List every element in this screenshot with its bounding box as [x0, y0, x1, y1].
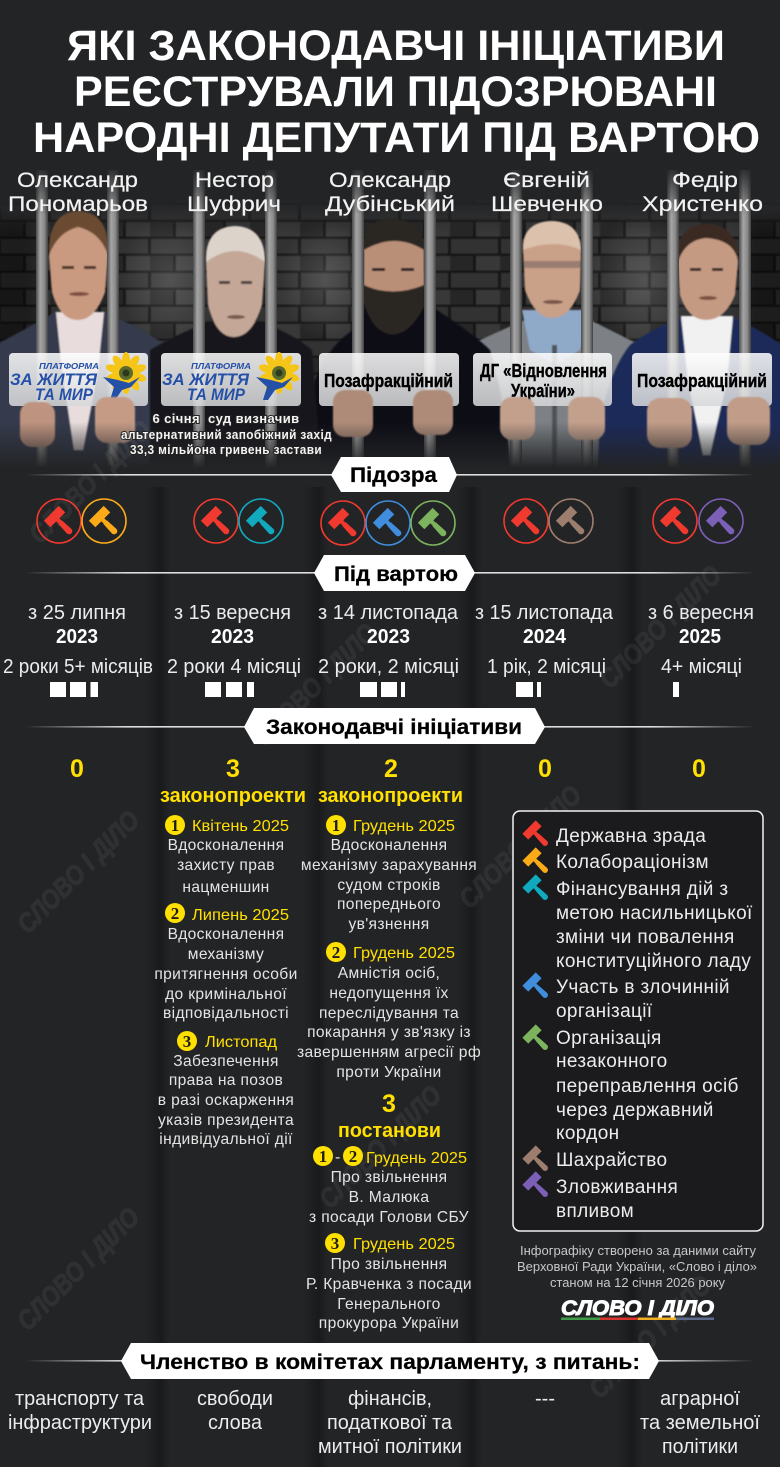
- legend: illegal border crossing: через державний: [556, 1100, 714, 1121]
- item 1: механізму зарахування: [301, 857, 477, 874]
- counts: zero initiatives: 0: [538, 755, 552, 783]
- person: Христенко: [597, 224, 780, 480]
- item 2: [154, 903, 298, 1022]
- resolution 3: прокурора України: [319, 1315, 459, 1332]
- watermarks: СЛОВО І ДІЛО: [593, 560, 727, 694]
- section: committees: [25, 1343, 755, 1379]
- committee: Шевченко: ---: [535, 1388, 555, 1410]
- committee: Христенко: та земельної: [640, 1412, 760, 1434]
- names: Христенко: [642, 193, 763, 216]
- party plates: [9, 353, 772, 406]
- gavels: Пономарьов: [37, 499, 126, 543]
- resolutions 1-2: Про звільнення: [331, 1169, 447, 1186]
- item 2: Грудень 2025: [353, 945, 455, 962]
- resolutions 1-2: 1: [319, 1147, 327, 1166]
- plate: Платформа за життя та мир 2: ЗА ЖИТТЯ: [162, 370, 250, 389]
- note: bail: альтернативний запобіжний захід: [121, 427, 332, 442]
- legend: criminal organisation: Участь в злочинній: [556, 977, 730, 998]
- resolutions 1-2: 2: [349, 1147, 357, 1166]
- item 1: 1: [171, 816, 179, 835]
- title: НАРОДНІ ДЕПУТАТИ ПІД ВАРТОЮ: [33, 114, 760, 162]
- custody: Шевченко: з 15 листопада: [475, 602, 614, 624]
- item 1: Квітень 2025: [192, 818, 289, 835]
- initiatives: Дубінський: законопроекти: [318, 785, 463, 807]
- item 3: [158, 1031, 294, 1148]
- resolution 3: Генерального: [337, 1296, 441, 1313]
- section: Під вартою: [25, 555, 755, 591]
- names: Федір: [672, 169, 738, 192]
- custody: Шевченко: [475, 602, 614, 697]
- note: bail: 6 січня суд визначив: [152, 411, 300, 426]
- title: ЯКІ ЗАКОНОДАВЧІ ІНІЦІАТИВИ: [67, 22, 725, 70]
- names: Шевченко: [491, 193, 603, 216]
- committee: Дубінський: фінансів,: [348, 1388, 432, 1410]
- item 2: [297, 942, 481, 1081]
- custody: Христенко: з 6 вересня: [648, 602, 754, 624]
- item 2: недопущення їх: [329, 985, 449, 1002]
- committee: Христенко: [640, 1388, 760, 1458]
- committee: Христенко: політики: [662, 1436, 738, 1458]
- custody: Шуфрич: 2023: [211, 626, 254, 648]
- prison bars: [0, 165, 780, 470]
- watermarks: СЛОВО І ДІЛО: [11, 1202, 145, 1336]
- legend: state treason: Державна зрада: [556, 826, 706, 847]
- bottom fade: [0, 422, 780, 487]
- plate: Платформа за життя та мир 1: ПЛАТФОРМА: [39, 361, 99, 371]
- legend: financing: Фінансування дій з: [556, 879, 728, 900]
- legend: collaboration: [522, 847, 709, 879]
- custody: Христенко: 2025: [679, 626, 721, 648]
- item 3: права на позов: [169, 1072, 283, 1089]
- counts: zero initiatives: 0: [692, 755, 706, 783]
- item 2: Амністія осіб,: [338, 965, 440, 982]
- item 3: 3: [183, 1032, 191, 1051]
- initiatives: Шуфрич: 3: [226, 755, 240, 783]
- committee: Пономарьов: [8, 1388, 152, 1434]
- source note: Верховної Ради України, «Слово і діло»: [517, 1259, 757, 1274]
- committee: Дубінський: податкової та: [327, 1412, 453, 1434]
- custody: Христенко: 4+ місяці: [661, 656, 742, 678]
- gavels: Христенко: [653, 499, 743, 543]
- item 2: відповідальності: [163, 1005, 289, 1022]
- names: Олександр: [329, 169, 451, 192]
- resolutions 1-2: [309, 1146, 469, 1226]
- plate: Платформа за життя та мир 1: ТА МИР: [35, 385, 94, 404]
- plate: Позафракційний 1: Позафракційний: [324, 370, 453, 391]
- legend: illegal border crossing: переправлення осіб: [556, 1076, 739, 1097]
- initiatives: Шуфрич: [154, 755, 306, 1148]
- item 3: Забезпечення: [173, 1053, 279, 1070]
- section: Законодавчі ініціативи: [25, 708, 755, 744]
- plate: Платформа за життя та мир 1: [10, 352, 147, 404]
- resolution 3: 3: [331, 1234, 339, 1253]
- item 2: механізму: [188, 946, 264, 963]
- legend: abuse of influence: Зловживання: [556, 1177, 678, 1198]
- watermarks: СЛОВО І ДІЛО: [313, 1080, 447, 1214]
- names: Нестор: [195, 169, 274, 192]
- resolutions 1-2: В. Малюка: [349, 1189, 429, 1206]
- names: [8, 169, 763, 216]
- item 2: покарання у зв'язку із: [307, 1024, 471, 1041]
- item 1: Грудень 2025: [353, 818, 455, 835]
- plate: Платформа за життя та мир 2: [162, 352, 300, 404]
- note: bail: [121, 411, 332, 457]
- gavels: Шуфрич: [194, 499, 283, 543]
- legend panel: [513, 811, 763, 1231]
- resolution 3: Р. Кравченка з посади: [306, 1276, 472, 1293]
- resolution 3: Про звільнення: [331, 1256, 447, 1273]
- section: Законодавчі ініціативи: Законодавчі ініціативи: [266, 716, 522, 739]
- item 1: попереднього: [337, 896, 441, 913]
- custody: Шуфрич: 2 роки 4 місяці: [167, 656, 301, 678]
- legend: financing: зміни чи повалення: [556, 927, 735, 948]
- item 3: Листопад: [205, 1034, 278, 1051]
- photo panel: deputies behind bars: [0, 165, 780, 487]
- plate: ДГ Відновлення України: ДГ «Відновлення: [480, 360, 607, 381]
- custody: Христенко: [648, 602, 754, 697]
- gavels: Дубінський: [321, 501, 455, 545]
- resolutions 1-2: з посади Голови СБУ: [309, 1209, 469, 1226]
- committee: Шуфрич: свободи: [197, 1388, 273, 1410]
- custody: Дубінський: 2 роки, 2 місяці: [318, 656, 459, 678]
- legend: criminal organisation: [522, 972, 730, 1022]
- logo: СЛОВО І ДІЛО: [561, 1297, 714, 1320]
- custody: Пономарьов: 2 роки 5+ місяців: [3, 656, 153, 678]
- item 2: до кримінальної: [165, 986, 287, 1003]
- gavels: Шевченко: [504, 499, 593, 543]
- plate: ДГ Відновлення України: [480, 360, 607, 401]
- names: Дубінський: [325, 193, 455, 216]
- item 3: індивідуальної дії: [159, 1131, 293, 1148]
- committee: Дубінський: [318, 1388, 462, 1458]
- resolutions 1-2: -: [335, 1149, 340, 1166]
- names: Пономарьов: [8, 193, 148, 216]
- section: Під вартою: Під вартою: [334, 563, 458, 586]
- legend: financing: [522, 874, 753, 972]
- initiatives: Дубінський: постанови: [338, 1120, 441, 1142]
- source note: [517, 1243, 757, 1290]
- custody: Дубінський: [318, 602, 459, 697]
- plate: Платформа за життя та мир 2: ТА МИР: [187, 385, 246, 404]
- custody: Пономарьов: 2023: [56, 626, 98, 648]
- legend: state treason: [522, 820, 706, 852]
- title: РЕЄСТРУВАЛИ ПІДОЗРЮВАНІ: [74, 68, 717, 116]
- item 1: захисту прав: [177, 857, 275, 874]
- legend: illegal border crossing: незаконного: [556, 1051, 668, 1072]
- watermarks: СЛОВО І ДІЛО: [23, 415, 157, 549]
- watermarks: [11, 415, 727, 1404]
- legend: fraud: [522, 1145, 667, 1177]
- item 1: Вдосконалення: [168, 837, 284, 854]
- item 2: 2: [332, 943, 340, 962]
- source note: Інфографіку створено за даними сайту: [520, 1243, 756, 1258]
- legend: criminal organisation: організації: [556, 1001, 653, 1022]
- names: Шуфрич: [187, 193, 281, 216]
- note: bail: 33,3 мільйона гривень застави: [130, 442, 322, 457]
- legend: abuse of influence: впливом: [556, 1201, 634, 1222]
- watermarks: СЛОВО І ДІЛО: [11, 805, 145, 939]
- committee: Христенко: аграрної: [660, 1388, 740, 1410]
- person: Шуфрич: [150, 226, 322, 480]
- legend: financing: конституційного ладу: [556, 951, 751, 972]
- item 1: судом строків: [337, 877, 441, 894]
- custody: Пономарьов: [3, 602, 153, 697]
- custody: Шуфрич: з 15 вересня: [174, 602, 291, 624]
- legend: illegal border crossing: кордон: [556, 1123, 619, 1144]
- item 2: проти України: [336, 1064, 442, 1081]
- item 2: завершенням агресії рф: [297, 1044, 481, 1061]
- resolution 3: Грудень 2025: [353, 1236, 455, 1253]
- legend: fraud: Шахрайство: [556, 1150, 667, 1171]
- section: Підозра: [25, 457, 755, 492]
- item 2: Липень 2025: [192, 907, 289, 924]
- section: Підозра: Підозра: [350, 464, 437, 487]
- names: Євгеній: [503, 169, 590, 192]
- initiatives: Дубінський: 3: [382, 1090, 396, 1118]
- legend: abuse of influence: [522, 1171, 678, 1222]
- custody: Пономарьов: з 25 липня: [28, 602, 126, 624]
- initiatives: Дубінський: [297, 755, 481, 1332]
- item 1: ув'язнення: [348, 916, 430, 933]
- resolutions 1-2: Грудень 2025: [366, 1150, 467, 1167]
- legend: illegal border crossing: Організація: [556, 1028, 662, 1049]
- committee: Шуфрич: [197, 1388, 273, 1434]
- custody: Шевченко: 2024: [523, 626, 567, 648]
- initiatives: Дубінський: 2: [384, 755, 398, 783]
- person: Пономарьов: [0, 211, 172, 480]
- counts: zero initiatives: [70, 755, 706, 783]
- legend: collaboration: Колабораціонізм: [556, 852, 709, 873]
- resolution 3: [306, 1233, 472, 1332]
- plate: Платформа за життя та мир 2: ПЛАТФОРМА: [191, 361, 251, 371]
- item 1: Вдосконалення: [331, 837, 447, 854]
- source note: станом на 12 січня 2026 року: [550, 1275, 725, 1290]
- plate: ДГ Відновлення України: України»: [511, 380, 575, 401]
- item 2: 2: [171, 904, 179, 923]
- custody: Дубінський: 2023: [367, 626, 410, 648]
- hands on bars: [20, 390, 770, 448]
- names: Олександр: [17, 169, 138, 192]
- committee: Пономарьов: інфраструктури: [8, 1412, 152, 1434]
- committee: Дубінський: митної політики: [318, 1436, 462, 1458]
- initiatives: Шуфрич: законопроекти: [160, 785, 306, 807]
- plate: Платформа за життя та мир 1: ЗА ЖИТТЯ: [10, 370, 98, 389]
- watermarks: СЛОВО І ДІЛО: [248, 618, 382, 752]
- brick wall: [0, 195, 780, 435]
- item 3: в разі оскарження: [158, 1092, 294, 1109]
- custody: Шевченко: 1 рік, 2 місяці: [487, 656, 606, 678]
- watermarks: СЛОВО І ДІЛО: [583, 1270, 717, 1404]
- legend: illegal border crossing: [522, 1024, 739, 1144]
- item 1: [301, 815, 477, 933]
- item 3: указів президента: [158, 1112, 294, 1129]
- person: Дубінський: [300, 219, 510, 480]
- counts: zero initiatives: 0: [70, 755, 84, 783]
- committee: Пономарьов: транспорту та: [15, 1388, 145, 1410]
- committee: Шуфрич: слова: [208, 1412, 263, 1434]
- legend: financing: метою насильницької: [556, 903, 753, 924]
- person: Шевченко: [470, 221, 650, 480]
- watermarks: СЛОВО І ДІЛО: [453, 780, 587, 914]
- section: committees: Членство в комітетах парламенту, з питань:: [140, 1351, 640, 1374]
- item 1: нацменшин: [182, 879, 270, 896]
- custody: Дубінський: з 14 листопада: [318, 602, 459, 624]
- item 2: переслідування та: [319, 1005, 459, 1022]
- item 1: 1: [332, 816, 340, 835]
- item 2: Вдосконалення: [168, 926, 284, 943]
- item 2: притягнення особи: [154, 966, 298, 983]
- custody: Шуфрич: [167, 602, 301, 697]
- title: [33, 22, 760, 162]
- item 1: [165, 815, 289, 896]
